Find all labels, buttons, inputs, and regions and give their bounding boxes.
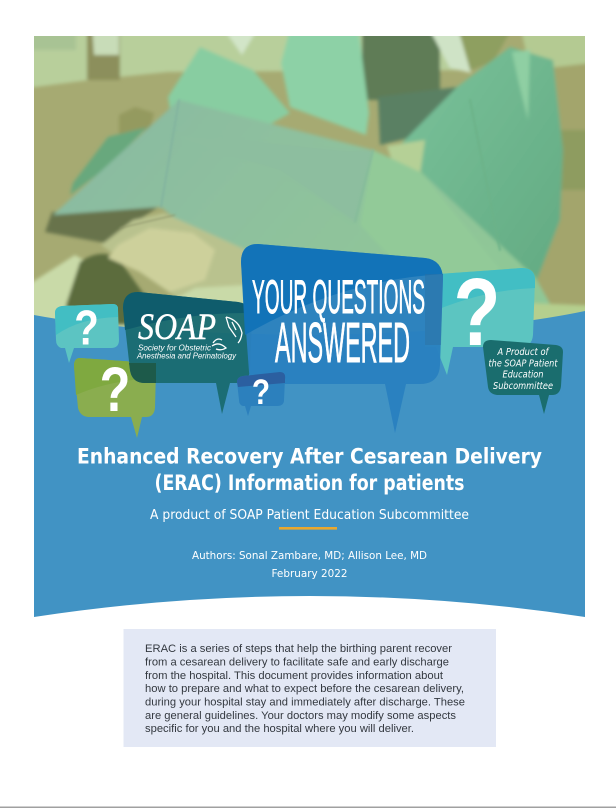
authors and date: February 2022 bbox=[272, 567, 348, 580]
intro paragraph: ERAC is a series of steps that help the birthing parent recover bbox=[145, 643, 452, 655]
SOAP full name: Anesthesia and Perinatology bbox=[136, 350, 237, 360]
SOAP wordmark: SOAP bbox=[138, 307, 216, 348]
intro paragraph: from a cesarean delivery to facilitate safe and early discharge bbox=[145, 656, 449, 668]
icon: SOAP emblem bbox=[212, 317, 242, 350]
main title: Enhanced Recovery After Cesarean Delivery bbox=[77, 444, 542, 468]
blue title panel bbox=[34, 311, 585, 617]
SOAP full name bbox=[136, 342, 237, 360]
intro paragraph: specific for you and the hospital where you will deliver. bbox=[145, 723, 414, 735]
question mark: ? bbox=[74, 301, 99, 355]
speech bubble: your questions answered: ANSWERED bbox=[275, 311, 410, 375]
intro paragraph: are general guidelines. Your doctors may modify some aspects bbox=[145, 710, 457, 722]
bubble text bbox=[488, 347, 559, 392]
accent bar bbox=[279, 527, 337, 530]
photo: operating room with green overlay bbox=[34, 36, 585, 327]
main title: (ERAC) Information for patients bbox=[154, 471, 464, 495]
authors and date: Authors: Sonal Zambare, MD; Allison Lee, MD bbox=[192, 549, 427, 562]
subtitle: A product of SOAP Patient Education Subcommittee bbox=[150, 508, 469, 523]
speech bubble: green question bbox=[74, 355, 156, 438]
speech bubble: your questions answered bbox=[241, 244, 443, 433]
speech bubble: small teal question bbox=[55, 301, 119, 363]
authors and date bbox=[192, 549, 427, 580]
main title bbox=[77, 444, 542, 495]
bubble text: the SOAP Patient bbox=[488, 358, 559, 370]
bubble text: Subcommittee bbox=[493, 381, 553, 392]
speech bubble: large teal question bbox=[425, 259, 535, 375]
bubble text: Education bbox=[502, 370, 544, 380]
question mark: ? bbox=[100, 355, 130, 425]
speech bubble: product of subcommittee bbox=[483, 340, 563, 414]
intro text box bbox=[124, 629, 496, 747]
question mark: ? bbox=[454, 259, 500, 366]
bubble text: A Product of bbox=[497, 347, 550, 358]
intro paragraph: from the hospital. This document provides information about bbox=[145, 670, 443, 682]
intro paragraph bbox=[145, 643, 465, 735]
intro paragraph: during your hospital stay and immediately after discharge. These bbox=[145, 697, 465, 709]
question mark: ? bbox=[252, 373, 270, 412]
speech bubble: SOAP logo bbox=[123, 292, 252, 414]
SOAP full name: Society for Obstetric bbox=[138, 342, 212, 352]
intro paragraph: how to prepare and what to expect before the cesarean delivery, bbox=[145, 683, 464, 695]
speech bubble: small blue question bbox=[237, 372, 285, 416]
